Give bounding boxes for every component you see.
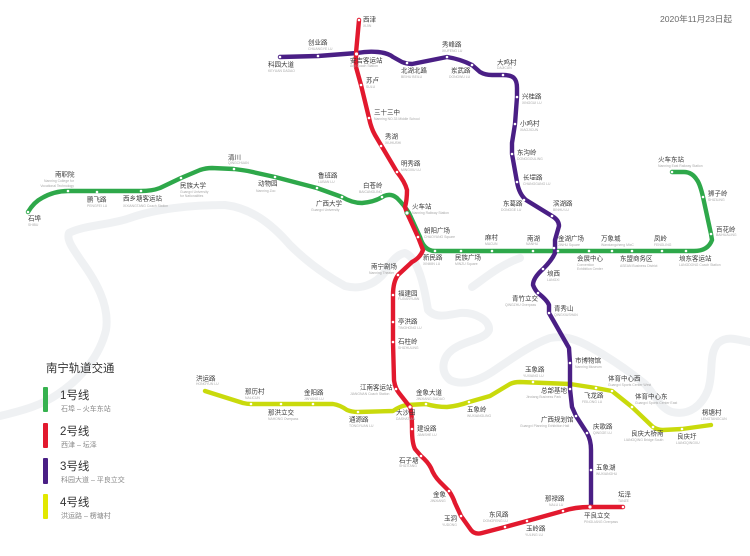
station: 那禄路: 那禄路 [545, 494, 565, 502]
station: 狮子岭: SHIZILING [708, 198, 725, 202]
station: 金湖广场 [558, 234, 584, 247]
station: 鲁班路: 鲁班路 [318, 170, 338, 180]
station: 玉岭路: 玉岭路 [526, 524, 546, 532]
station: 坛泽: TANZE [618, 499, 630, 503]
station: 南职院: Nanning College for [44, 179, 75, 183]
station: 麻村: 麻村 [485, 232, 498, 242]
station: 东盟商务区: ASEAN Business District [620, 264, 658, 268]
station: 金阳路: JINYANG LU [304, 397, 324, 401]
station: 那历村 [245, 386, 265, 400]
station: 金象大道 [416, 388, 445, 401]
station: 那历村: NALICUN [245, 396, 260, 400]
station: 青秀山: 青秀山 [554, 304, 574, 312]
station: 小鸡村: XIAOJICUN [520, 128, 539, 132]
station: 鹏飞路: PENGFEI LU [87, 204, 108, 208]
station: 青秀山 [554, 304, 578, 317]
station: 良庆大桥南: 良庆大桥南 [631, 428, 664, 438]
station: 良庆圩: 良庆圩 [677, 432, 697, 440]
legend: line 4: 洪运路 – 楞塘村 [61, 511, 111, 520]
station: 安吉客运站: 安吉客运站 [350, 56, 383, 64]
station: 新民路 [423, 252, 443, 266]
station: 小鸡村: 小鸡村 [520, 118, 540, 128]
station: 埌西: LANGXI [547, 278, 559, 282]
station: 南职院 [40, 170, 75, 188]
station: 万象城: Wanxiangcheng MixC [601, 243, 634, 247]
station: 平良立交: 平良立交 [584, 510, 610, 520]
station: 民族大学: Guangxi University [180, 190, 209, 194]
station: 青竹立交: QINGZHU Overpass [505, 303, 536, 307]
station: 福建园: FUJIANYUAN [398, 297, 420, 301]
station: 那洪立交: 那洪立交 [268, 408, 294, 416]
station: 石柱岭 [398, 336, 419, 350]
station: 东盟商务区 [620, 254, 658, 268]
legend: line 3: 3号线 [60, 459, 90, 473]
station: 那禄路: NALU LU [549, 503, 564, 507]
line 4 yellow [205, 381, 711, 430]
station: 秀峰路 [442, 40, 463, 53]
station: 秀湖 [385, 132, 401, 145]
station: 兴桂路: 兴桂路 [522, 92, 542, 100]
station: 东风路: 东风路 [489, 510, 509, 518]
station: 埌东客运站 [679, 254, 721, 267]
station: 体育中心西 [608, 374, 651, 387]
station: 民族大学: for Nationalities [180, 194, 204, 198]
station: 民族广场 [455, 252, 482, 266]
legend: line 4: 4号线 [60, 495, 90, 509]
legend title: 南宁轨道交通 [46, 361, 115, 375]
station: 东葛路: DONGGE LU [501, 208, 522, 212]
legend: line 2: 2号线 [60, 424, 90, 438]
station: 石埠: SHIBU [28, 223, 39, 227]
station: 民族大学 [180, 180, 209, 198]
station: 那洪立交 [268, 408, 299, 421]
station: 江南客运站: JIANGNAN Coach Station [350, 392, 389, 396]
station: 南湖: NANHU [526, 242, 539, 246]
station: 五象湖: WUXIANGHU [596, 472, 618, 476]
station: 南职院: Vocational Technology [40, 184, 74, 188]
station: 东风路 [483, 510, 509, 523]
station: 狮子岭 [708, 188, 728, 202]
station: 青竹立交: 青竹立交 [512, 294, 538, 302]
station: 埌东客运站: 埌东客运站 [679, 254, 712, 262]
station: 五象岭: 五象岭 [467, 404, 487, 414]
station: 埌东客运站: LANGDONG Coach Station [679, 263, 721, 267]
station: 东沟岭: DONGGOULING [517, 157, 543, 161]
station: 庆歌路 [593, 422, 613, 435]
station: 建设路 [417, 424, 437, 437]
station: 金象大道: 金象大道 [416, 388, 442, 396]
river [0, 205, 750, 416]
station: 体育中心东 [635, 392, 677, 405]
station: 玉岭路 [525, 524, 546, 537]
legend: line 4 [43, 494, 111, 520]
station: 楞塘村: 楞塘村 [702, 408, 722, 416]
station: 滨湖路 [553, 198, 573, 212]
station: 白苍岭 [359, 180, 383, 194]
station: 西乡塘客运站: 西乡塘客运站 [123, 194, 162, 202]
station: 那洪立交: NAHONG Overpass [268, 417, 299, 421]
station: 朝阳广场 [424, 226, 455, 239]
station: 朝阳广场: 朝阳广场 [424, 226, 450, 234]
station: 百花岭 [716, 224, 737, 237]
station: 西津: XIJIN [363, 24, 372, 28]
station: 市博物馆: Nanning Museum [575, 365, 602, 369]
station: 亭洪路: TINGHONG LU [398, 326, 422, 330]
station: 玉象路: 玉象路 [525, 364, 545, 374]
legend: line 1 [43, 387, 111, 413]
station: 总部基地: 总部基地 [541, 386, 568, 394]
station: 创业路: 创业路 [308, 38, 328, 46]
station: 北湖北路: 北湖北路 [401, 66, 428, 74]
station: 新民路: 新民路 [423, 252, 443, 262]
station: 广西大学 [311, 198, 342, 212]
station: 飞龙路: FEILONG LU [582, 400, 603, 404]
station: 滨湖路: BINHU LU [553, 208, 569, 212]
station: 苏卢 [366, 76, 380, 89]
station: 岽武路: 岽武路 [451, 66, 471, 74]
station: 总部基地: Jinxiang Business Park [526, 395, 561, 399]
station: 金象: 金象 [433, 490, 446, 498]
station: 三十三中: 三十三中 [374, 108, 400, 116]
station: 坛泽: 坛泽 [618, 490, 632, 498]
station: 西乡塘客运站: XIXIANGTANG Coach Station [123, 204, 168, 208]
station: 金湖广场: JINHU Square [558, 243, 580, 247]
station: 青秀山: QINGXIUSHAN [554, 313, 578, 317]
station: 创业路 [308, 38, 333, 51]
station: 苏卢: SULU [366, 85, 376, 89]
station: 埌西 [547, 268, 560, 282]
station: 大沙田: 大沙田 [396, 408, 416, 416]
station: 科园大道: KEYUAN DADAO [268, 69, 295, 73]
station: 火车东站 [658, 154, 703, 168]
station: 飞龙路: 飞龙路 [584, 390, 604, 400]
station: 西津: 西津 [363, 16, 376, 24]
station: 石埠 [28, 214, 42, 227]
station: 三十三中 [374, 108, 420, 121]
station: 东沟岭 [517, 148, 543, 161]
station: 通源路: 通源路 [349, 414, 369, 424]
station: 东葛路: 东葛路 [503, 198, 523, 208]
station: 科园大道 [268, 60, 295, 73]
station: 埌西: 埌西 [547, 268, 560, 278]
station: 平良立交: PINGLIANG Overpass [584, 520, 618, 524]
station: 大沙田 [396, 408, 416, 421]
station: 总部基地 [526, 386, 568, 399]
station: 火车站: Nanning Railway Station [412, 211, 449, 215]
station: 南湖 [526, 234, 540, 246]
station: 西乡塘客运站 [123, 194, 168, 208]
station: 玉洞: 玉洞 [444, 514, 458, 522]
station: 科园大道: 科园大道 [268, 60, 294, 68]
station: 福建园 [398, 288, 420, 301]
station: 会展中心: 会展中心 [577, 254, 604, 262]
station: 体育中心东: Guangxi Sports Center East [635, 401, 677, 405]
station: 明秀路: 明秀路 [401, 158, 421, 168]
legend: line 1: 石埠 – 火车东站 [61, 404, 111, 413]
station: 秀湖: XIUHUSHI [385, 141, 401, 145]
station: 凤岭: 凤岭 [654, 234, 668, 242]
station: 凤岭: FENGLING [654, 243, 672, 247]
station: 飞龙路 [582, 390, 604, 404]
station: 洪运路: HONGYUN LU [196, 382, 219, 386]
station: 坛泽 [618, 490, 632, 503]
station: 良庆圩 [676, 432, 700, 445]
station: 岽武路: DONGWU LU [449, 75, 471, 79]
station: 火车东站: Nanning East Railway Station [658, 164, 703, 168]
station: 广西大学: 广西大学 [316, 198, 342, 208]
station: 动物园: 动物园 [258, 178, 278, 188]
legend [43, 361, 125, 520]
station: 鲁班路: LUBAN LU [318, 180, 335, 184]
station: 青竹立交 [505, 294, 538, 307]
station: 玉洞 [442, 514, 458, 527]
station: 那禄路 [545, 494, 565, 507]
station: 金阳路 [304, 388, 324, 401]
station: 广西规划馆: Guangxi Planning Exhibition Hall [520, 424, 569, 428]
station: 秀峰路: XIUFENG LU [442, 49, 463, 53]
station: 五象岭: WUXIANGLING [467, 414, 491, 418]
station: 楞塘村: LENGTANGCUN [701, 417, 727, 421]
station: 动物园 [256, 178, 278, 193]
line 2 red [354, 18, 625, 534]
station: 市博物馆: 市博物馆 [575, 356, 602, 364]
legend: line 1: 1号线 [60, 388, 90, 402]
station: 东风路: DONGFENG LU [483, 519, 508, 523]
station: 广西大学: Guangxi University [311, 208, 340, 212]
station: 明秀路: MINGXIU LU [401, 168, 421, 172]
station: 金象 [430, 490, 446, 503]
station: 石柱岭: 石柱岭 [398, 336, 418, 346]
station: 长堽路: CHANGGANG LU [523, 182, 551, 186]
station: 亭洪路: 亭洪路 [398, 316, 418, 326]
station: 三十三中: Nanning NO.33 Middle School [374, 117, 420, 121]
station: 五象湖 [596, 462, 618, 476]
station: 金湖广场: 金湖广场 [558, 234, 584, 242]
station: 大沙田: DASHATIAN [396, 417, 416, 421]
station: 鲁班路 [318, 170, 338, 184]
station: 火车站: 火车站 [412, 202, 432, 210]
station: 大鸡村 [497, 58, 517, 70]
station: 万象城 [601, 234, 634, 247]
station: 江南客运站 [350, 382, 393, 396]
station: 石子塘 [399, 456, 419, 468]
station: 通源路: TONGYUAN LU [349, 424, 374, 428]
station: 白苍岭: BAICANGLING [359, 190, 383, 194]
station: 清川: QINGCHUAN [228, 161, 249, 165]
station: 石埠: 石埠 [28, 214, 42, 222]
line 3 purple [278, 52, 592, 507]
station: 南宁剧场: 南宁剧场 [371, 262, 398, 270]
station: 秀湖: 秀湖 [385, 132, 398, 140]
station: 玉象路: YUXIANG LU [523, 374, 544, 378]
station: 南湖: 南湖 [527, 234, 540, 242]
station: 白苍岭: 白苍岭 [363, 180, 383, 190]
station: 良庆大桥南 [624, 428, 664, 442]
station: 兴桂路: XINGGUI LU [522, 101, 542, 105]
station: 北湖北路 [401, 66, 428, 79]
station: 石柱岭: SHIZHULING [398, 346, 419, 350]
station: 大鸡村: 大鸡村 [497, 58, 517, 66]
station: 火车站 [412, 202, 449, 215]
station: 百花岭: BAIHUALING [716, 233, 737, 237]
station: 五象岭 [467, 404, 491, 418]
station: 大鸡村: DAJICUN [497, 66, 512, 70]
station: 动物园: Nanning Zoo [256, 189, 276, 193]
station: 万象城: 万象城 [601, 234, 621, 242]
station: 玉象路 [523, 364, 545, 378]
station: 楞塘村 [701, 408, 727, 421]
station: 建设路: JIANSHE LU [417, 433, 437, 437]
station: 市博物馆 [575, 356, 602, 369]
station: 体育中心西: Guangxi Sports Center West [608, 383, 651, 387]
station: 民族大学: 民族大学 [180, 180, 206, 190]
station: 洪运路: 洪运路 [196, 374, 216, 382]
station: 石子塘: SHIZITANG [399, 464, 417, 468]
station: 会展中心: Convention [577, 263, 594, 267]
station: 苏卢: 苏卢 [366, 76, 380, 84]
station: 清川: 清川 [228, 152, 241, 162]
station: 兴桂路 [522, 92, 542, 105]
station: 良庆大桥南: LIANGQING Bridge South [624, 438, 664, 442]
station: 良庆圩: LIANGQINGXU [676, 441, 700, 445]
station: 秀峰路: 秀峰路 [442, 40, 462, 48]
date note: 2020年11月23日起 [660, 13, 732, 24]
station: 体育中心东: 体育中心东 [635, 392, 668, 400]
station: 百花岭: 百花岭 [716, 224, 736, 234]
station: 会展中心 [577, 254, 604, 271]
station: 南宁剧场: Nanning Theater [369, 271, 395, 275]
station: 广西规划馆 [520, 414, 574, 428]
station: 那历村: 那历村 [245, 386, 265, 396]
station: 亭洪路 [398, 316, 422, 330]
station: 麻村: MACUN [485, 242, 498, 246]
line 1 green [26, 168, 712, 252]
station: 北湖北路: BEIHU BEILU [401, 75, 423, 79]
station: 会展中心: Exhibition Center [577, 267, 604, 271]
station: 火车东站: 火车东站 [658, 154, 684, 164]
station: 江南客运站: 江南客运站 [360, 382, 393, 392]
station: 通源路 [349, 414, 374, 428]
station: 金阳路: 金阳路 [304, 388, 324, 396]
station: 庆歌路: 庆歌路 [593, 422, 613, 430]
station: 民族广场: 民族广场 [455, 252, 482, 262]
station: 广西规划馆: 广西规划馆 [541, 414, 574, 424]
station: 东葛路 [501, 198, 523, 212]
legend: line 2: 西津 – 坛泽 [61, 440, 97, 449]
station: 西津 [363, 16, 376, 28]
station: 狮子岭: 狮子岭 [708, 188, 728, 198]
station: 洪运路 [196, 374, 219, 386]
station: 玉洞: YUDONG [442, 523, 457, 527]
station: 长堽路: 长堽路 [523, 172, 543, 182]
station: 长堽路 [523, 172, 551, 186]
station: 鹏飞路 [87, 194, 108, 208]
station: 安吉客运站: Anji Coach Station [350, 64, 378, 68]
station: 滨湖路: 滨湖路 [553, 198, 573, 208]
station: 东盟商务区: 东盟商务区 [620, 254, 653, 262]
station: 凤岭 [654, 234, 672, 247]
station: 建设路: 建设路 [417, 424, 437, 432]
station: 民族广场: MINZU Square [455, 262, 478, 266]
station: 创业路: CHUANGYE LU [308, 47, 333, 51]
station: 鹏飞路: 鹏飞路 [87, 194, 107, 204]
station: 五象湖: 五象湖 [596, 462, 616, 472]
station: 朝阳广场: CHAOYANG Square [424, 235, 455, 239]
legend: line 3: 科园大道 – 平良立交 [61, 475, 125, 484]
station: 玉岭路: YULING LU [525, 533, 543, 537]
station: 南职院: 南职院 [55, 170, 75, 178]
station: 平良立交 [584, 510, 618, 524]
station: 体育中心西: 体育中心西 [608, 374, 641, 382]
station: 麻村 [485, 232, 498, 246]
station: 南宁剧场 [369, 262, 398, 275]
station: 小鸡村 [520, 118, 540, 132]
station: 庆歌路: QINGGE LU [593, 431, 612, 435]
station: 岽武路 [449, 66, 471, 79]
station: 金象: JINXIANG [430, 499, 446, 503]
legend: line 2 [43, 423, 97, 449]
station: 新民路: XINMIN LU [423, 262, 441, 266]
legend: line 3 [43, 458, 125, 484]
station: 安吉客运站 [350, 56, 383, 68]
station: 金象大道: JINXIANG DADAO [416, 397, 445, 401]
station: 清川 [228, 152, 249, 165]
station: 明秀路 [401, 158, 421, 172]
station: 福建园: 福建园 [398, 288, 418, 298]
station: 石子塘: 石子塘 [399, 456, 419, 464]
station: 东沟岭: 东沟岭 [517, 148, 537, 156]
